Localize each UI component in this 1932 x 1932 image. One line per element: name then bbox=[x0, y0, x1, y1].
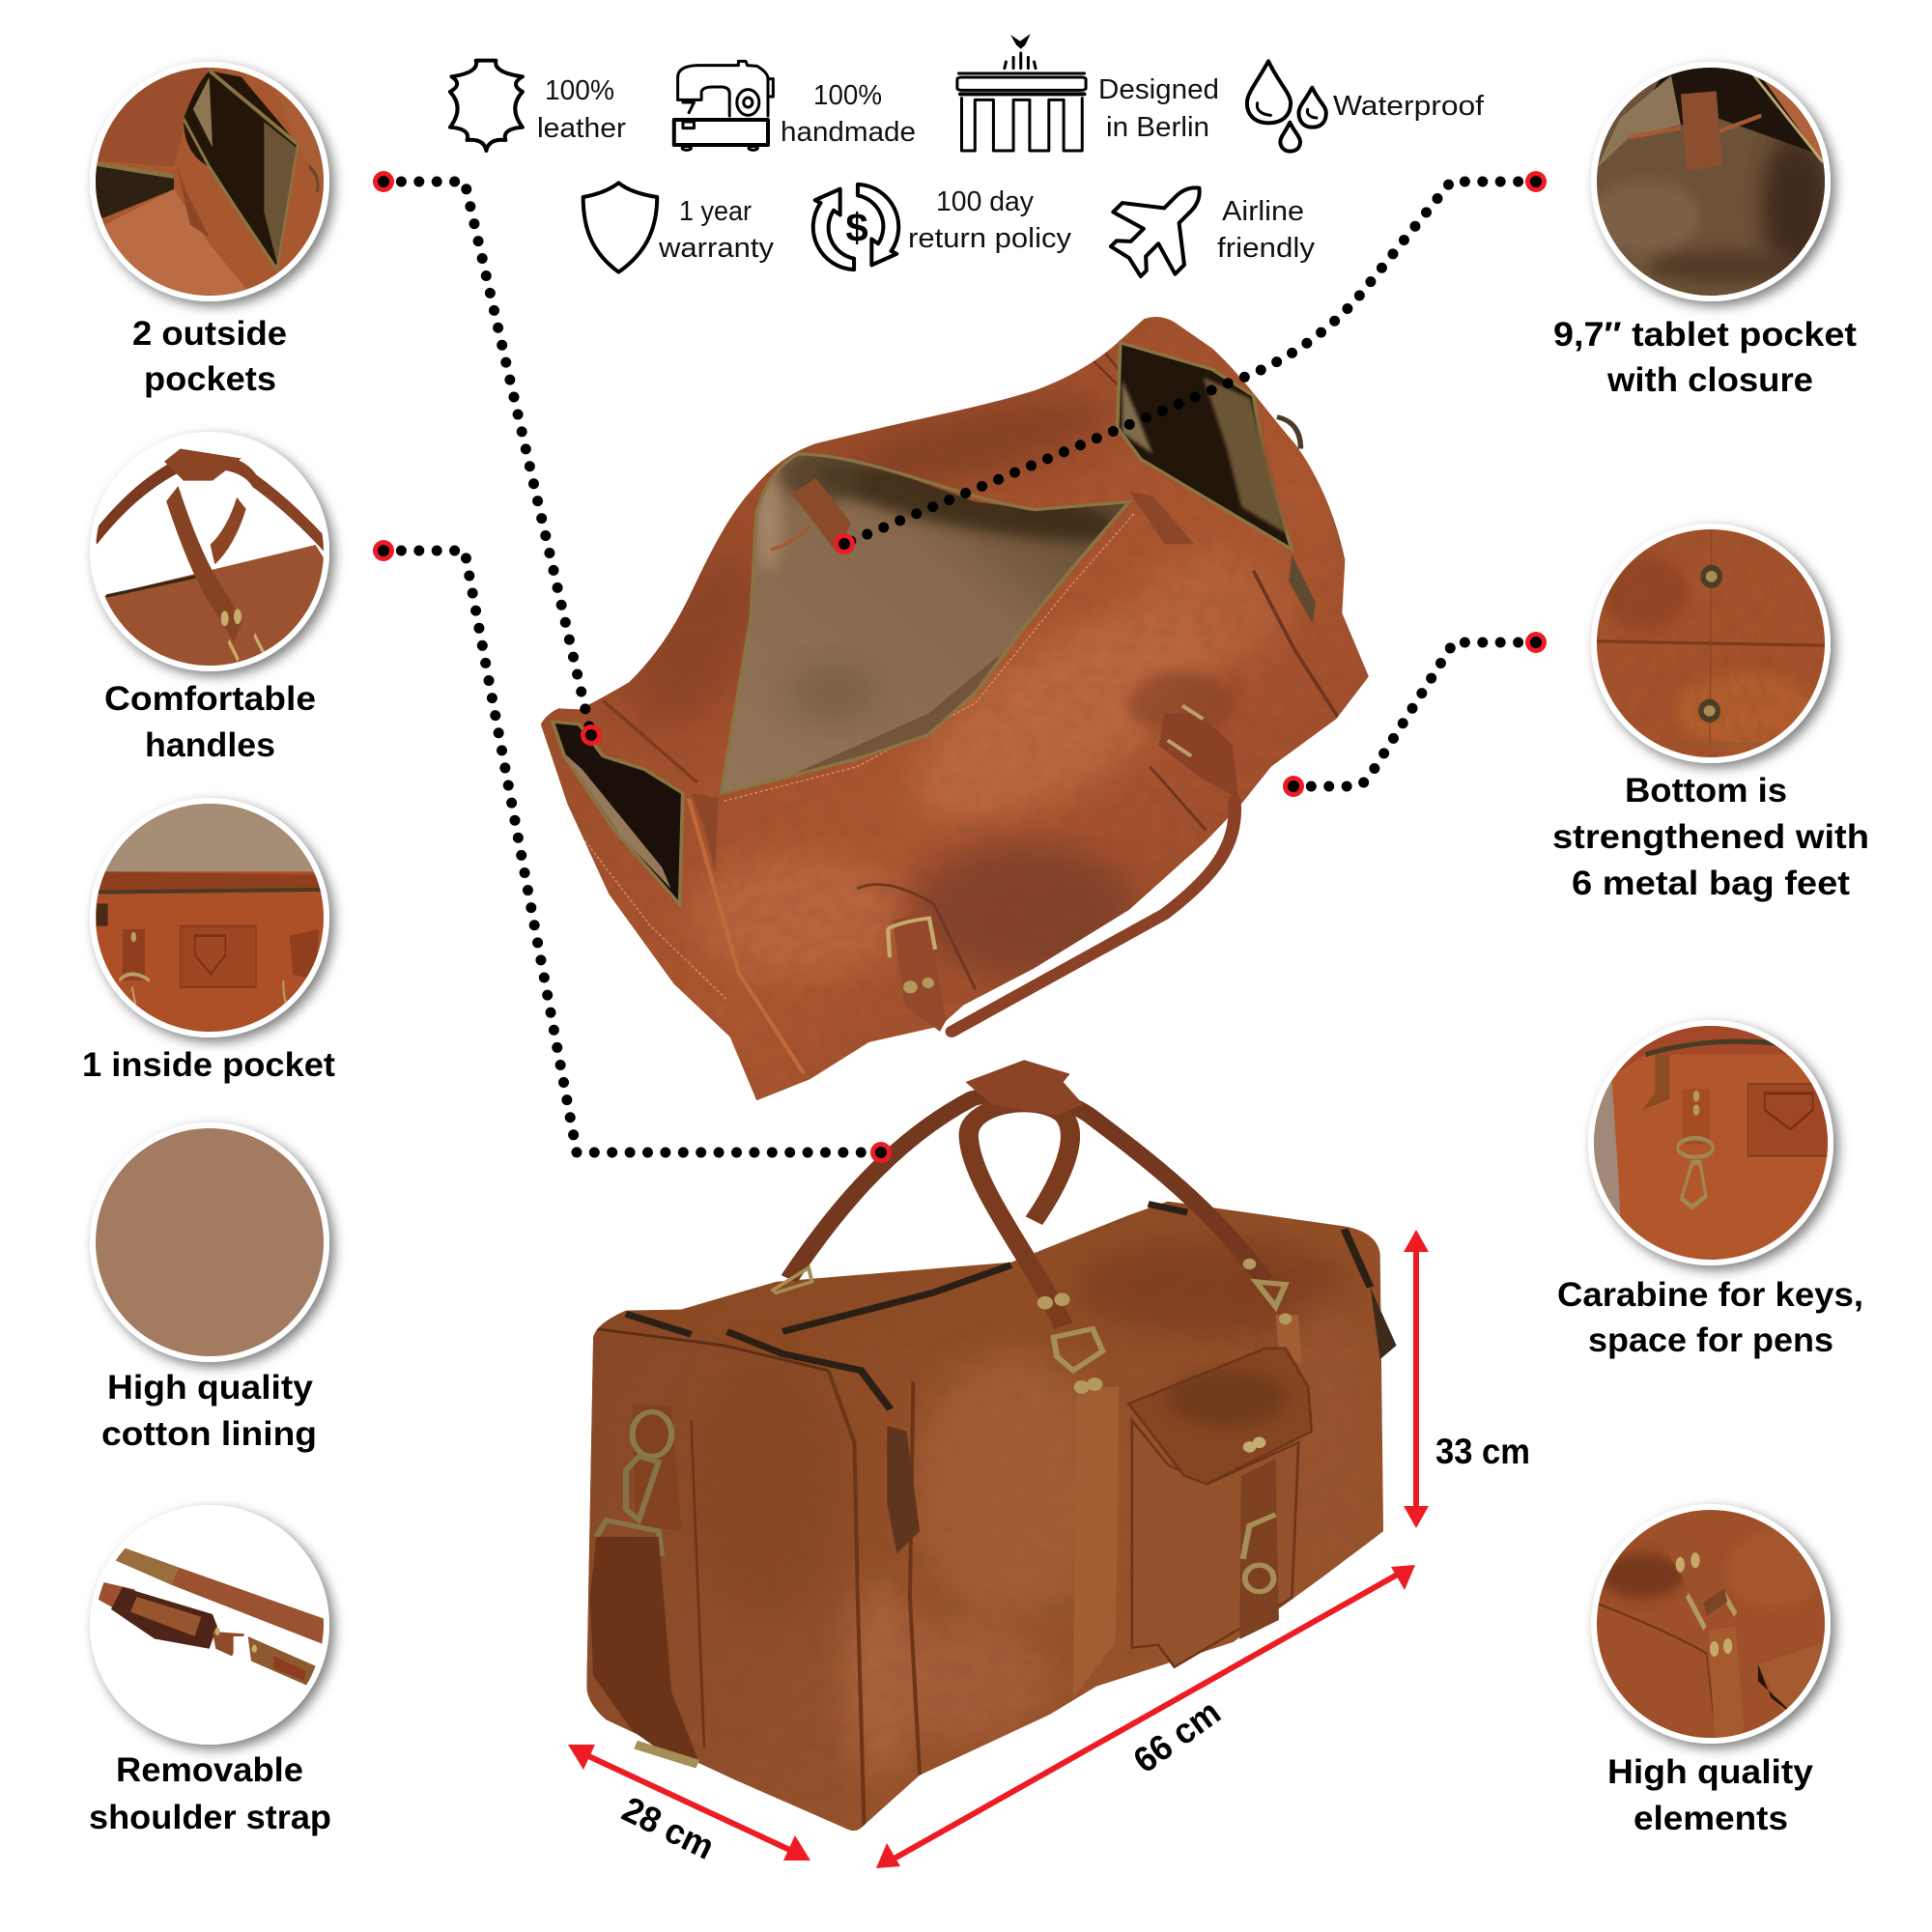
dimension: depth 28 cm: 28 cm bbox=[616, 1789, 721, 1867]
leader line: comfortable handles bbox=[373, 540, 892, 1163]
zipper pulls bbox=[887, 1426, 920, 1553]
leader line: 2 outside pockets bbox=[373, 171, 602, 746]
front pocket body bbox=[1132, 1420, 1298, 1667]
benefit: 100 day return policy bbox=[813, 185, 1072, 270]
right end pocket opening bbox=[1118, 343, 1292, 550]
main zipper edge bbox=[722, 454, 1129, 793]
icon group: top benefit icons bbox=[450, 34, 1485, 293]
dimension: height 33 cm bbox=[1404, 1230, 1530, 1528]
front handle bbox=[789, 1094, 1265, 1282]
callout: high quality elements: High quality bbox=[1607, 1753, 1814, 1791]
icon: airplane bbox=[1094, 157, 1230, 293]
callout: carabine for keys bbox=[1557, 1020, 1863, 1359]
benefit: 100% handmade: handmade bbox=[781, 117, 916, 148]
callout: removable shoulder strap: shoulder strap bbox=[89, 1799, 331, 1836]
icon: water drops bbox=[1247, 61, 1326, 152]
callout: comfortable handles: handles bbox=[145, 726, 275, 764]
metal ring on top right bbox=[1277, 417, 1300, 449]
callout: high quality cotton lining: High quality bbox=[107, 1369, 314, 1406]
dimension: height 33 cm: 33 cm bbox=[1435, 1432, 1530, 1471]
icon: Brandenburg Gate bbox=[957, 34, 1086, 151]
photo: closed duffel bag with handles bbox=[586, 1060, 1397, 1832]
pocket buckle bbox=[1243, 1515, 1275, 1592]
icon: shield bbox=[583, 183, 657, 272]
zipper pull centre bbox=[1129, 491, 1194, 544]
centre vertical strap bbox=[1073, 1387, 1119, 1697]
pocket trim bbox=[772, 526, 810, 550]
benefit: airline friendly: Airline bbox=[1222, 196, 1304, 227]
inner tablet pocket tab bbox=[792, 478, 851, 553]
leader line: bottom strengthened bbox=[1283, 632, 1547, 797]
right pocket lining bbox=[1203, 378, 1286, 533]
callout: bottom strengthened bbox=[1552, 524, 1869, 902]
icon: leather hide bbox=[450, 61, 523, 151]
zipper pull left bbox=[692, 793, 718, 872]
right pocket lining left strip bbox=[1122, 380, 1152, 454]
flap rivets bbox=[1243, 1437, 1265, 1453]
front rivets bbox=[903, 978, 934, 993]
benefit: 1 year warranty: 1 year bbox=[679, 196, 752, 227]
benefit: 100% handmade bbox=[674, 61, 916, 150]
leader line: tablet pocket bbox=[834, 171, 1547, 554]
benefit: airline friendly: friendly bbox=[1217, 233, 1316, 264]
handle strap ring and rivets bbox=[1037, 1259, 1292, 1394]
benefit: designed in Berlin: in Berlin bbox=[1106, 112, 1209, 143]
benefit: 100% leather bbox=[450, 61, 626, 151]
left end pocket opening bbox=[553, 722, 683, 904]
benefit: 100 day return policy: return policy bbox=[908, 223, 1072, 254]
callout: bottom strengthened: Bottom is bbox=[1625, 772, 1787, 810]
benefit: 100% leather: 100% bbox=[545, 75, 614, 106]
benefit: waterproof bbox=[1247, 61, 1485, 152]
zipper tracks bbox=[626, 1204, 1371, 1409]
pocket buckle strap bbox=[1239, 1459, 1279, 1639]
front strap loop bbox=[893, 910, 946, 1032]
loop at far handle base bbox=[773, 1267, 812, 1293]
callout: high quality cotton lining bbox=[90, 1122, 329, 1453]
benefit: 1 year warranty bbox=[583, 183, 775, 272]
dimension: length 66 cm: 66 cm bbox=[1126, 1691, 1228, 1780]
icon: money-back arrows: $ bbox=[845, 205, 868, 250]
callout: 2 outside pockets: 2 outside bbox=[132, 315, 287, 353]
left pocket lining sliver bbox=[564, 753, 670, 889]
callout: 1 inside pocket bbox=[82, 795, 335, 1084]
callout: 2 outside pockets: pockets bbox=[144, 360, 276, 398]
photo: open duffel bag from above bbox=[541, 317, 1369, 1101]
callout: comfortable handles bbox=[87, 430, 335, 764]
benefit: designed in Berlin bbox=[957, 34, 1219, 151]
callout: high quality cotton lining: cotton lining bbox=[101, 1415, 317, 1453]
callout: carabine for keys: Carabine for keys, bbox=[1557, 1276, 1863, 1314]
icon: sewing machine bbox=[674, 61, 773, 150]
callout: bottom strengthened: strengthened with bbox=[1552, 818, 1869, 856]
benefit: waterproof: Waterproof bbox=[1333, 91, 1485, 122]
benefit: 100 day return policy: 100 day bbox=[936, 186, 1034, 217]
callout: tablet pocket: 9,7″ tablet pocket bbox=[1553, 316, 1857, 354]
icon: money-back arrows bbox=[813, 185, 898, 270]
callout: bottom strengthened: 6 metal bag feet bbox=[1572, 865, 1850, 902]
shoulder handle bbox=[952, 801, 1235, 1032]
benefit: airline friendly bbox=[1094, 157, 1316, 293]
callout: removable shoulder strap bbox=[89, 1505, 331, 1836]
bag interior lining bbox=[715, 447, 1135, 793]
rear brass ring bbox=[1168, 706, 1203, 756]
callout: 2 outside pockets bbox=[87, 58, 335, 398]
callout: high quality elements bbox=[1591, 1504, 1835, 1837]
callout: tablet pocket bbox=[1553, 57, 1857, 399]
zipper pull right bbox=[1289, 554, 1316, 624]
side strap with carabiner bbox=[590, 1404, 697, 1764]
callout: removable shoulder strap: Removable bbox=[116, 1751, 303, 1789]
right vertical strap bbox=[1275, 1315, 1302, 1365]
benefit: 100% handmade: 100% bbox=[813, 80, 882, 111]
dimension: depth 28 cm bbox=[568, 1745, 810, 1867]
benefit: 100% leather: leather bbox=[537, 113, 626, 144]
rear handle loop bbox=[969, 1104, 1070, 1326]
flap shading bbox=[1168, 1371, 1286, 1426]
side strap loop bbox=[1159, 714, 1238, 799]
rear right zipper pull bbox=[1371, 1288, 1397, 1359]
dimension: length 66 cm bbox=[876, 1565, 1415, 1868]
pocket flap bbox=[1128, 1349, 1312, 1484]
handle grip wrap bbox=[965, 1060, 1083, 1116]
benefit: 1 year warranty: warranty bbox=[658, 233, 775, 264]
benefit: designed in Berlin: Designed bbox=[1098, 74, 1219, 105]
callout: high quality elements: elements bbox=[1634, 1800, 1788, 1837]
callout: 1 inside pocket: 1 inside pocket bbox=[82, 1046, 335, 1084]
callout: carabine for keys: space for pens bbox=[1588, 1321, 1833, 1359]
callout: comfortable handles: Comfortable bbox=[104, 680, 316, 718]
front brass ring bbox=[888, 919, 935, 957]
callout: tablet pocket: with closure bbox=[1606, 361, 1813, 399]
